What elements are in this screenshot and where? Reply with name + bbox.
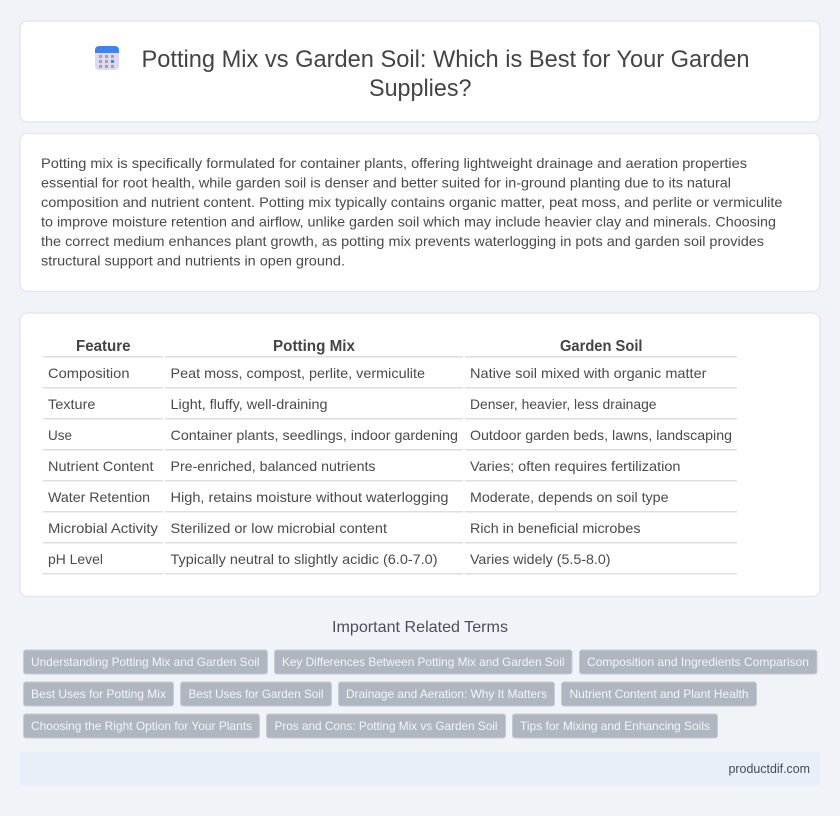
row: water retention: High, retains moisture without waterlogging	[170, 489, 448, 505]
row: nutrient content	[43, 458, 737, 482]
row: use: Outdoor garden beds, lawns, landscaping	[470, 427, 732, 443]
row: water retention	[43, 489, 737, 512]
tag list: related terms: Understanding Potting Mix and Garden Soil	[31, 655, 260, 669]
tag list: related terms	[24, 650, 817, 738]
row: microbial activity: Microbial Activity	[48, 520, 158, 536]
row: pH level	[43, 551, 737, 574]
footer	[20, 752, 820, 786]
tag list: related terms: Drainage and Aeration: Why It Matters	[346, 687, 547, 701]
row: use: Use	[48, 427, 72, 443]
heading: related terms: Important Related Terms	[332, 619, 508, 636]
row: use	[43, 427, 737, 450]
row: composition	[43, 365, 737, 388]
row: pH level: Varies widely (5.5-8.0)	[470, 551, 610, 567]
description text: composition and nutrient content. Potting mix typically contains organic matter, peat moss, and perlite or vermiculite	[41, 194, 783, 210]
row: texture: Light, fluffy, well-draining	[170, 396, 328, 412]
description text: to improve moisture retention and airflow, unlike garden soil which may include heavier clay and minerals. Choosing	[41, 214, 776, 230]
tag list: related terms: Best Uses for Garden Soil	[188, 687, 324, 701]
panel: comparison table	[20, 313, 820, 596]
icon: calendar grid	[95, 46, 119, 70]
tag list: related terms: Key Differences Between Potting Mix and Garden Soil	[282, 655, 564, 669]
title: Supplies?	[369, 75, 472, 102]
row: composition: Native soil mixed with organic matter	[470, 365, 707, 381]
table header row	[43, 338, 737, 358]
row: microbial activity: Sterilized or low microbial content	[170, 520, 387, 536]
description text: the correct medium enhances plant growth, as potting mix prevents waterlogging in pots and garden soil provides	[41, 233, 764, 249]
row: pH level: Typically neutral to slightly acidic (6.0-7.0)	[170, 551, 438, 567]
row: microbial activity: Rich in beneficial microbes	[470, 520, 640, 536]
row: water retention: Moderate, depends on soil type	[470, 489, 669, 505]
table header row: Feature	[76, 338, 131, 355]
title	[142, 46, 750, 102]
row: pH level: pH Level	[48, 551, 103, 567]
footer: productdif.com	[728, 761, 810, 776]
description text: essential for root health, while garden soil is denser and better suited for in-ground planting due to its natural	[41, 174, 731, 190]
row: texture: Denser, heavier, less drainage	[470, 396, 657, 412]
tag list: related terms: Pros and Cons: Potting Mix vs Garden Soil	[274, 719, 498, 733]
row: texture	[43, 396, 737, 420]
title: Potting Mix vs Garden Soil: Which is Best for Your Garden	[142, 46, 750, 73]
row: microbial activity	[43, 520, 737, 544]
panel: description	[20, 134, 820, 292]
row: nutrient content: Varies; often requires fertilization	[470, 458, 680, 474]
description text: structural support and nutrients in open ground.	[41, 252, 345, 268]
tag list: related terms: Best Uses for Potting Mix	[31, 687, 166, 701]
row: use: Container plants, seedlings, indoor gardening	[170, 427, 458, 443]
panel: header	[20, 21, 820, 122]
row: nutrient content: Nutrient Content	[48, 458, 154, 474]
tag list: related terms: Choosing the Right Option for Your Plants	[31, 719, 252, 733]
table header row: Potting Mix	[273, 338, 355, 355]
tag list: related terms: Nutrient Content and Plant Health	[570, 687, 748, 701]
row: texture: Texture	[48, 396, 96, 412]
row: water retention: Water Retention	[48, 489, 150, 505]
tag list: related terms: Tips for Mixing and Enhancing Soils	[520, 719, 710, 733]
row: composition: Composition	[48, 365, 130, 381]
description text	[41, 155, 783, 268]
table header row: Garden Soil	[560, 338, 642, 355]
row: nutrient content: Pre-enriched, balanced nutrients	[170, 458, 376, 474]
row: composition: Peat moss, compost, perlite, vermiculite	[170, 365, 425, 381]
description text: Potting mix is specifically formulated for container plants, offering lightweight drainage and aeration properties	[41, 155, 747, 171]
tag list: related terms: Composition and Ingredients Comparison	[587, 655, 809, 669]
